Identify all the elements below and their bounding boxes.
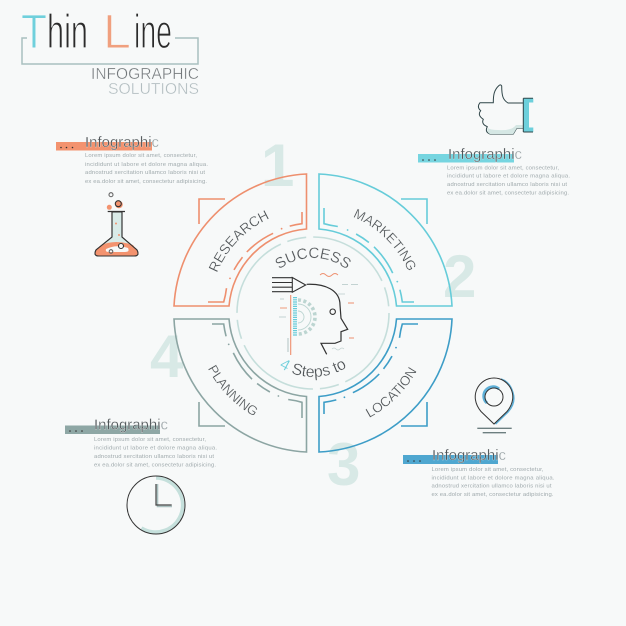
panel: text block location: ex ea.dolor sit amet, consectetur adipisicing. — [432, 492, 554, 498]
panel: text block planning: adnostrud xercitation ullamco laboris nisi ut — [94, 454, 214, 460]
label: marketing: MARKETING — [354, 209, 416, 270]
icon: clock — [127, 476, 185, 534]
heading: success: SUCCESS — [276, 248, 351, 268]
panel: text block location — [403, 447, 555, 498]
panel: text block research — [56, 134, 208, 185]
label: research: RESEARCH — [208, 210, 269, 272]
panel: text block planning: incididunt ut labore et dolore magna aliqua. — [94, 446, 217, 452]
panel: text block location: Lorem ipsum dolor sit amet, consectetur, — [432, 467, 544, 473]
title: Thin Line logo: ine — [134, 6, 172, 59]
panel: location segment — [319, 319, 452, 452]
heading research: Infographic — [85, 134, 159, 151]
inner dashed circle — [237, 237, 389, 389]
title: Thin Line logo: hin — [47, 6, 88, 59]
panel: research segment — [174, 174, 306, 306]
icon: location pin — [475, 378, 514, 433]
panel: planning segment — [174, 319, 306, 452]
panel: text block marketing: incididunt ut labore et dolore magna aliqua. — [447, 174, 570, 180]
number 1: 1 — [261, 132, 294, 199]
heading location: Infographic — [432, 447, 506, 464]
title: Thin Line logo: INFOGRAPHIC — [91, 66, 199, 83]
label: planning: PLANNING — [208, 364, 258, 415]
title: Thin Line logo: SOLUTIONS — [108, 81, 199, 98]
bar research — [56, 142, 152, 150]
heading: 4 steps to: 4 Steps to — [280, 360, 346, 380]
icon: flask — [95, 193, 138, 256]
panel: text block marketing — [418, 146, 570, 197]
bar location — [403, 455, 498, 464]
number 4: 4 — [150, 323, 184, 390]
label: location: LOCATION — [366, 366, 416, 418]
title: Thin Line logo: T — [21, 6, 47, 59]
panel: text block marketing: adnostrud xercitation ullamco laboris nisi ut — [447, 182, 567, 188]
panel: text block marketing: ex ea.dolor sit amet, consectetur adipisicing. — [447, 191, 569, 197]
title: Thin Line logo: L — [103, 6, 131, 59]
panel: text block research: incididunt ut labore et dolore magna aliqua. — [85, 162, 208, 168]
panel: text block marketing: Lorem ipsum dolor sit amet, consectetur, — [447, 165, 559, 171]
panel: text block planning: Lorem ipsum dolor sit amet, consectetur, — [94, 437, 206, 443]
panel: text block research: ex ea.dolor sit amet, consectetur adipisicing. — [85, 179, 207, 185]
panel: text block research: Lorem ipsum dolor sit amet, consectetur, — [85, 153, 197, 159]
heading planning: Infographic — [94, 416, 168, 434]
number 3: 3 — [327, 431, 360, 498]
icon: head with pencil and gear — [272, 274, 358, 355]
icon: thumbs up — [478, 85, 533, 134]
bar planning — [65, 426, 160, 434]
panel: text block research: adnostrud xercitation ullamco laboris nisi ut — [85, 170, 205, 176]
heading marketing: Infographic — [448, 146, 522, 163]
number 2: 2 — [443, 243, 476, 310]
panel: text block location: incididunt ut labore et dolore magna aliqua. — [432, 476, 555, 482]
panel: text block planning — [65, 416, 217, 468]
title: Thin Line logo — [21, 6, 199, 98]
panel: text block planning: ex ea.dolor sit amet, consectetur adipisicing. — [94, 462, 216, 468]
panel: text block location: adnostrud xercitation ullamco laboris nisi ut — [432, 484, 552, 490]
panel: marketing segment — [319, 174, 452, 306]
bar marketing — [418, 154, 514, 162]
